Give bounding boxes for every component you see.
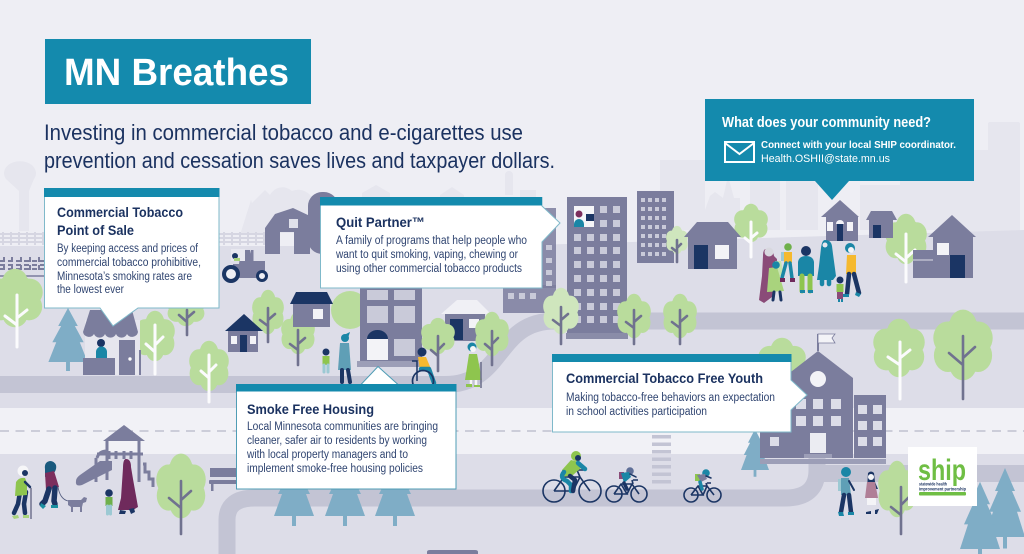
people: community group [759,240,861,303]
panel: smoke free housing: cleaner, safer air to residents by working [247,435,427,447]
crosswalk [652,435,671,484]
panel: commercial tobacco point of sale: By keeping access and prices of [57,243,199,255]
panel: commercial tobacco free youth: Making tobacco-free behaviors an expectation [566,392,775,404]
icon: envelope [725,142,754,162]
cyclists [543,470,721,502]
panel: quit partner: Quit Partner™ [336,214,425,230]
people: woman and child in playground [105,459,138,514]
trees [0,204,993,518]
light street band [0,408,1024,454]
subtitle: Investing in commercial tobacco and e-cigarettes use [44,120,523,145]
panel: smoke free housing: implement smoke-free housing policies [247,463,423,475]
panel: smoke free housing: with local property managers and to [246,449,408,461]
bottom grey object [427,550,478,554]
panel: commercial tobacco point of sale: commercial tobacco prohibitive, [57,257,201,269]
tree trunks white [5,222,915,402]
high-rise tower with person in window [566,197,628,339]
logo: ship: ship [918,454,966,487]
title [45,39,311,104]
panel: commercial tobacco point of sale: the lowest ever [57,284,124,296]
panel: quit partner: A family of programs that help people who [336,235,527,247]
panel: commercial tobacco point of sale: Point of Sale [57,222,134,238]
callout: community need [705,99,974,200]
road: lower [227,455,1024,554]
skyline [4,122,1020,235]
playground [76,425,153,487]
subtitle: prevention and cessation saves lives and taxpayer dollars. [44,148,555,173]
panel: commercial tobacco point of sale: Commercial Tobacco [57,204,183,220]
back houses [441,300,491,341]
panel: commercial tobacco free youth [552,354,807,432]
people: mother and child [322,332,351,382]
logo: ship: improvement partnership [919,486,966,492]
cyclist riders [562,451,711,491]
farm fence [0,232,270,245]
people: woman with cane [465,342,482,388]
right office building [637,191,674,263]
people: person in wheelchair [412,348,434,392]
tractor [224,249,266,281]
bench [209,468,237,491]
crops [0,257,44,276]
tobacco sales stand [83,310,141,375]
callout: community need: What does your community need? [722,114,931,131]
panel: smoke free housing: Smoke Free Housing [247,401,374,417]
panel: commercial tobacco free youth: Commercial Tobacco Free Youth [566,370,763,386]
people: elder with cane [12,466,31,519]
panel: commercial tobacco point of sale [44,188,220,326]
panel: commercial tobacco free youth: in school activities participation [566,406,707,418]
callout: community need: Connect with your local SHIP coordinator. [761,139,956,151]
panel: smoke free housing [236,366,456,489]
people: woman walking dog [40,461,87,512]
panel: quit partner: using other commercial tobacco products [336,263,522,275]
subtitle [44,120,555,173]
barn [265,192,338,254]
panel: quit partner [320,197,560,288]
people: students [838,467,879,516]
road: main upper [0,321,1024,384]
small navy-roof houses [225,292,333,352]
panel: smoke free housing: Local Minnesota communities are bringing [247,421,438,433]
ground [0,230,1024,554]
panel: quit partner: want to quit smoking, vaping, chewing or [335,249,518,261]
logo: ship [908,447,977,506]
title: MN Breathes [64,52,289,94]
panel: commercial tobacco point of sale: Minnesota’s smoking rates are [57,271,192,283]
callout: community need: Health.OSHII@state.mn.us [761,153,890,165]
apartment building [331,285,425,367]
tower behind quit partner [503,208,556,313]
school [760,334,886,464]
logo: ship: statewide health [919,482,947,486]
tree trunks grey [169,240,975,534]
blue pine trees [48,308,1024,554]
village houses [684,200,976,278]
